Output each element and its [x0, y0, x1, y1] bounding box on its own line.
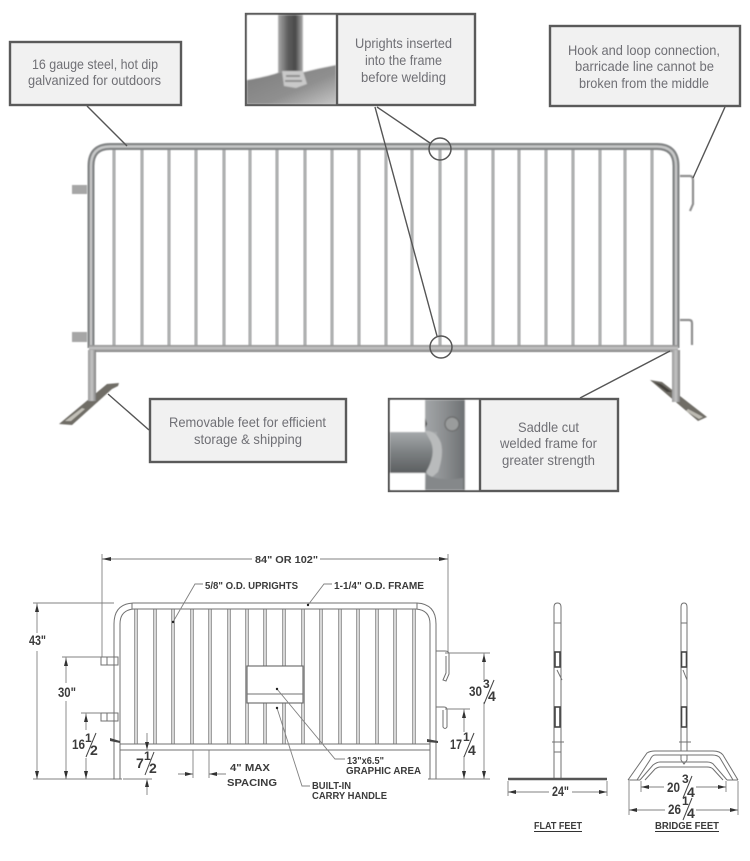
weld photo inset: [247, 15, 337, 104]
label: carry handle: CARRY HANDLE: [312, 790, 387, 802]
dimension: 26 1/4: 1: [682, 794, 689, 808]
callout: hook and loop: Hook and loop connection,: [568, 42, 720, 58]
callout: removable feet: Removable feet for efficient: [169, 414, 326, 430]
dimension: height 16 1/2: 16: [72, 736, 85, 752]
dimension: 20 3/4: [641, 772, 726, 800]
photo: galvanized barricade: [59, 146, 707, 425]
callout: steel gauge: galvanized for outdoors: [28, 72, 161, 88]
dimension: clearance 7 1/2: 7: [136, 755, 144, 771]
label: carry handle: [276, 707, 387, 802]
label: uprights diameter: 5/8" O.D. UPRIGHTS: [205, 580, 298, 592]
detail circle: top weld: [429, 138, 451, 160]
barricade uprights: [114, 150, 652, 345]
callout: hook and loop: [550, 26, 740, 178]
dimension: height 30: 30": [58, 684, 76, 700]
side view: bridge feet: [628, 603, 738, 832]
saddle weld photo inset: [390, 400, 480, 490]
dimension: spacing: 4" MAX: [230, 762, 270, 774]
label: frame diameter: [307, 580, 424, 606]
dimension: height 30: [58, 657, 101, 779]
dimension: height 16 1/2: [72, 713, 101, 779]
label: graphic area: [276, 688, 421, 777]
callout: removable feet: [108, 394, 346, 462]
dimension: clearance 7 1/2: 2: [149, 760, 157, 776]
bridge feet post: [679, 603, 691, 764]
dimension: 20 3/4: 3: [682, 772, 689, 786]
dimension: right height 30 3/4: [430, 653, 496, 779]
technical drawing: front elevation: [101, 603, 449, 779]
label: graphic area: 13"x6.5": [347, 755, 384, 767]
flat feet caption: FLAT FEET: [534, 820, 583, 832]
dimension: 26 1/4: 26: [668, 801, 681, 817]
label: carry handle: BUILT-IN: [312, 780, 351, 792]
dimension: 26 1/4: 4: [687, 805, 695, 821]
dimension: right height 30 3/4: 30: [469, 683, 482, 699]
label: graphic area: GRAPHIC AREA: [346, 765, 421, 777]
left post and removable foot: [59, 350, 119, 425]
dimension: height 16 1/2: 2: [90, 742, 98, 758]
flat feet dimension: 24": [552, 783, 569, 799]
barricade frame: [89, 146, 678, 352]
flat feet post: [552, 603, 564, 778]
callout: saddle cut with photo: [389, 351, 670, 491]
right hooks: [436, 651, 449, 728]
dimension: 26 1/4: [629, 781, 738, 821]
callout: uprights with weld photo: [246, 14, 475, 336]
drawing uprights: [136, 609, 414, 744]
dimension: spacing: SPACING: [227, 777, 277, 789]
label: uprights diameter: [172, 580, 298, 623]
left brackets: [72, 185, 87, 342]
dimension: spacing: [178, 750, 277, 789]
dimension: right height 17 1/4: 1: [463, 730, 470, 744]
dimension: height 43: [29, 603, 114, 779]
callout: hook and loop: broken from the middle: [579, 75, 709, 91]
graphic area panel: [247, 666, 303, 703]
callout: uprights with weld photo: before welding: [361, 69, 446, 85]
dimension: 20 3/4: 20: [667, 779, 680, 795]
callout: steel gauge: [10, 42, 181, 146]
detail circle: bottom weld: [430, 336, 452, 358]
left loops: [101, 657, 118, 721]
callout: hook and loop: barricade line cannot be: [575, 58, 714, 74]
right post and foot: [650, 350, 707, 421]
callout: uprights with weld photo: Uprights inserted: [355, 35, 452, 51]
right hook connectors: [680, 176, 693, 345]
label: frame diameter: 1-1/4" O.D. FRAME: [334, 580, 424, 592]
dimension: right height 17 1/4: [445, 709, 476, 779]
dimension: height 43: 43": [29, 632, 46, 648]
callout: saddle cut with photo: welded frame for: [499, 435, 597, 451]
drawing frame pins: [110, 738, 438, 743]
callout: removable feet: storage & shipping: [194, 431, 302, 447]
callout: steel gauge: 16 gauge steel, hot dip: [32, 56, 158, 72]
dimension: right height 30 3/4: 3: [483, 677, 490, 691]
dimension: overall width: [102, 554, 448, 657]
callout: saddle cut with photo: greater strength: [502, 452, 595, 468]
dimension: height 16 1/2: 1: [85, 731, 92, 745]
dimension: overall width: 84" OR 102": [255, 554, 318, 566]
dimension: right height 17 1/4: 4: [468, 742, 476, 758]
flat foot base: [508, 778, 607, 780]
callout: uprights with weld photo: into the frame: [365, 52, 442, 68]
flat feet dimension: [508, 781, 607, 799]
bridge foot arch: [628, 751, 738, 780]
side view: flat feet: [508, 603, 607, 832]
dimension: clearance 7 1/2: 1: [144, 749, 151, 763]
dimension: 20 3/4: 4: [687, 784, 695, 800]
bridge feet caption: BRIDGE FEET: [655, 820, 720, 832]
dimension: clearance 7 1/2: [123, 733, 157, 795]
dimension: right height 17 1/4: 17: [450, 736, 462, 752]
callout: saddle cut with photo: Saddle cut: [518, 419, 579, 435]
drawing frame: [112, 603, 438, 779]
dimension: right height 30 3/4: 4: [488, 688, 496, 704]
